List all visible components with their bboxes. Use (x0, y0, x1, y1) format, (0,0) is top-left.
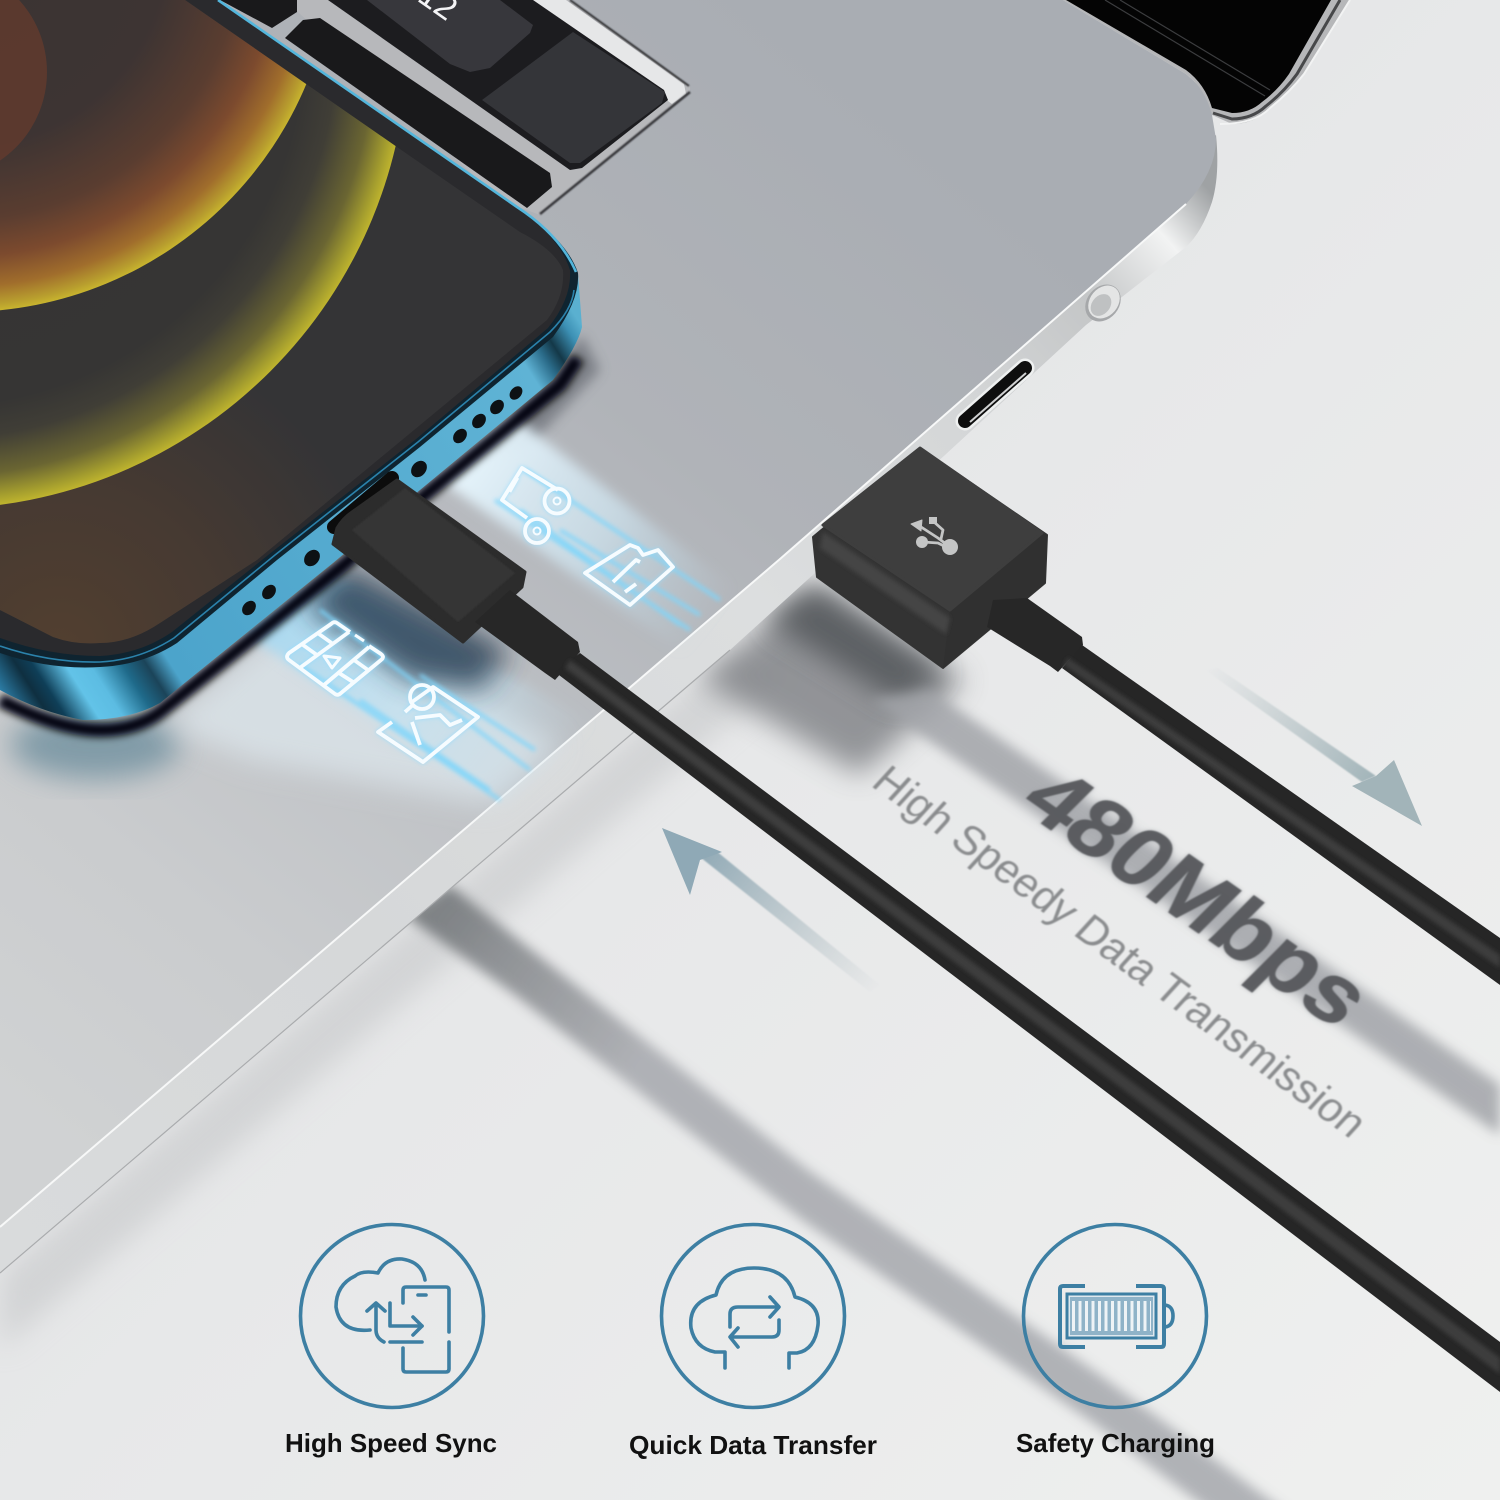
second device in upper right (1063, 0, 1350, 124)
icon: battery (1060, 1286, 1173, 1347)
icon: cloud with transfer arrows (691, 1268, 818, 1368)
top glass edge highlight (218, 0, 576, 272)
phone blue side frame (0, 0, 582, 720)
lightning connector (333, 480, 580, 680)
icon: video film (287, 622, 383, 695)
key: lower right (482, 32, 665, 163)
phone underside black shadow (0, 358, 578, 730)
key: long strip (285, 18, 552, 208)
microphone jack (1078, 277, 1128, 329)
circle badge (662, 1224, 844, 1408)
label: High Speed Sync (285, 1428, 497, 1458)
cable to laptop (1062, 645, 1500, 985)
feature: High Speed Sync (285, 1224, 497, 1458)
charging port (965, 368, 1026, 422)
arrow: outgoing right (1205, 668, 1422, 826)
laptop top surface (0, 0, 1216, 1227)
arrow: incoming left (662, 828, 880, 992)
speaker holes (239, 384, 525, 618)
rim highlight (0, 290, 574, 662)
circle badge (300, 1224, 484, 1408)
icon: USB symbol (911, 517, 958, 555)
icon: image picture (378, 685, 478, 762)
phone shadow on laptop (10, 335, 600, 779)
cable and laptop shadows on the table (0, 585, 1500, 1500)
key: F12 (367, 0, 533, 72)
heading: 480Mbps: 480Mbps (1003, 751, 1391, 1043)
label: Safety Charging (1016, 1428, 1215, 1458)
laptop (0, 0, 1217, 1273)
label: Quick Data Transfer (629, 1430, 877, 1460)
icon: file document with discs (502, 468, 570, 543)
heading: 480Mbps: 480Mbps (1003, 751, 1391, 1043)
icon: cloud and phone sync (336, 1259, 449, 1372)
phone glass bezel (0, 0, 570, 656)
USB connector (813, 448, 1083, 672)
data transfer light beams (165, 415, 738, 805)
feature: Quick Data Transfer (629, 1224, 877, 1460)
keyboard well (220, 0, 690, 215)
subheading: High Speedy Data Transmission: High Speedy Data Transmission (864, 757, 1376, 1146)
laptop front bevel (0, 135, 1217, 1273)
circle badge (1024, 1224, 1206, 1408)
feature: Safety Charging (1016, 1224, 1215, 1458)
cable to phone (555, 653, 1500, 1392)
phone (0, 0, 582, 720)
phone screen wallpaper (0, 0, 563, 644)
key well interior (328, 0, 668, 170)
chrome rim highlight (533, 0, 686, 104)
phone dark rim (0, 0, 578, 667)
bevel edge highlight (0, 204, 1186, 1227)
icon: folder (585, 545, 673, 605)
port collar (334, 478, 392, 527)
